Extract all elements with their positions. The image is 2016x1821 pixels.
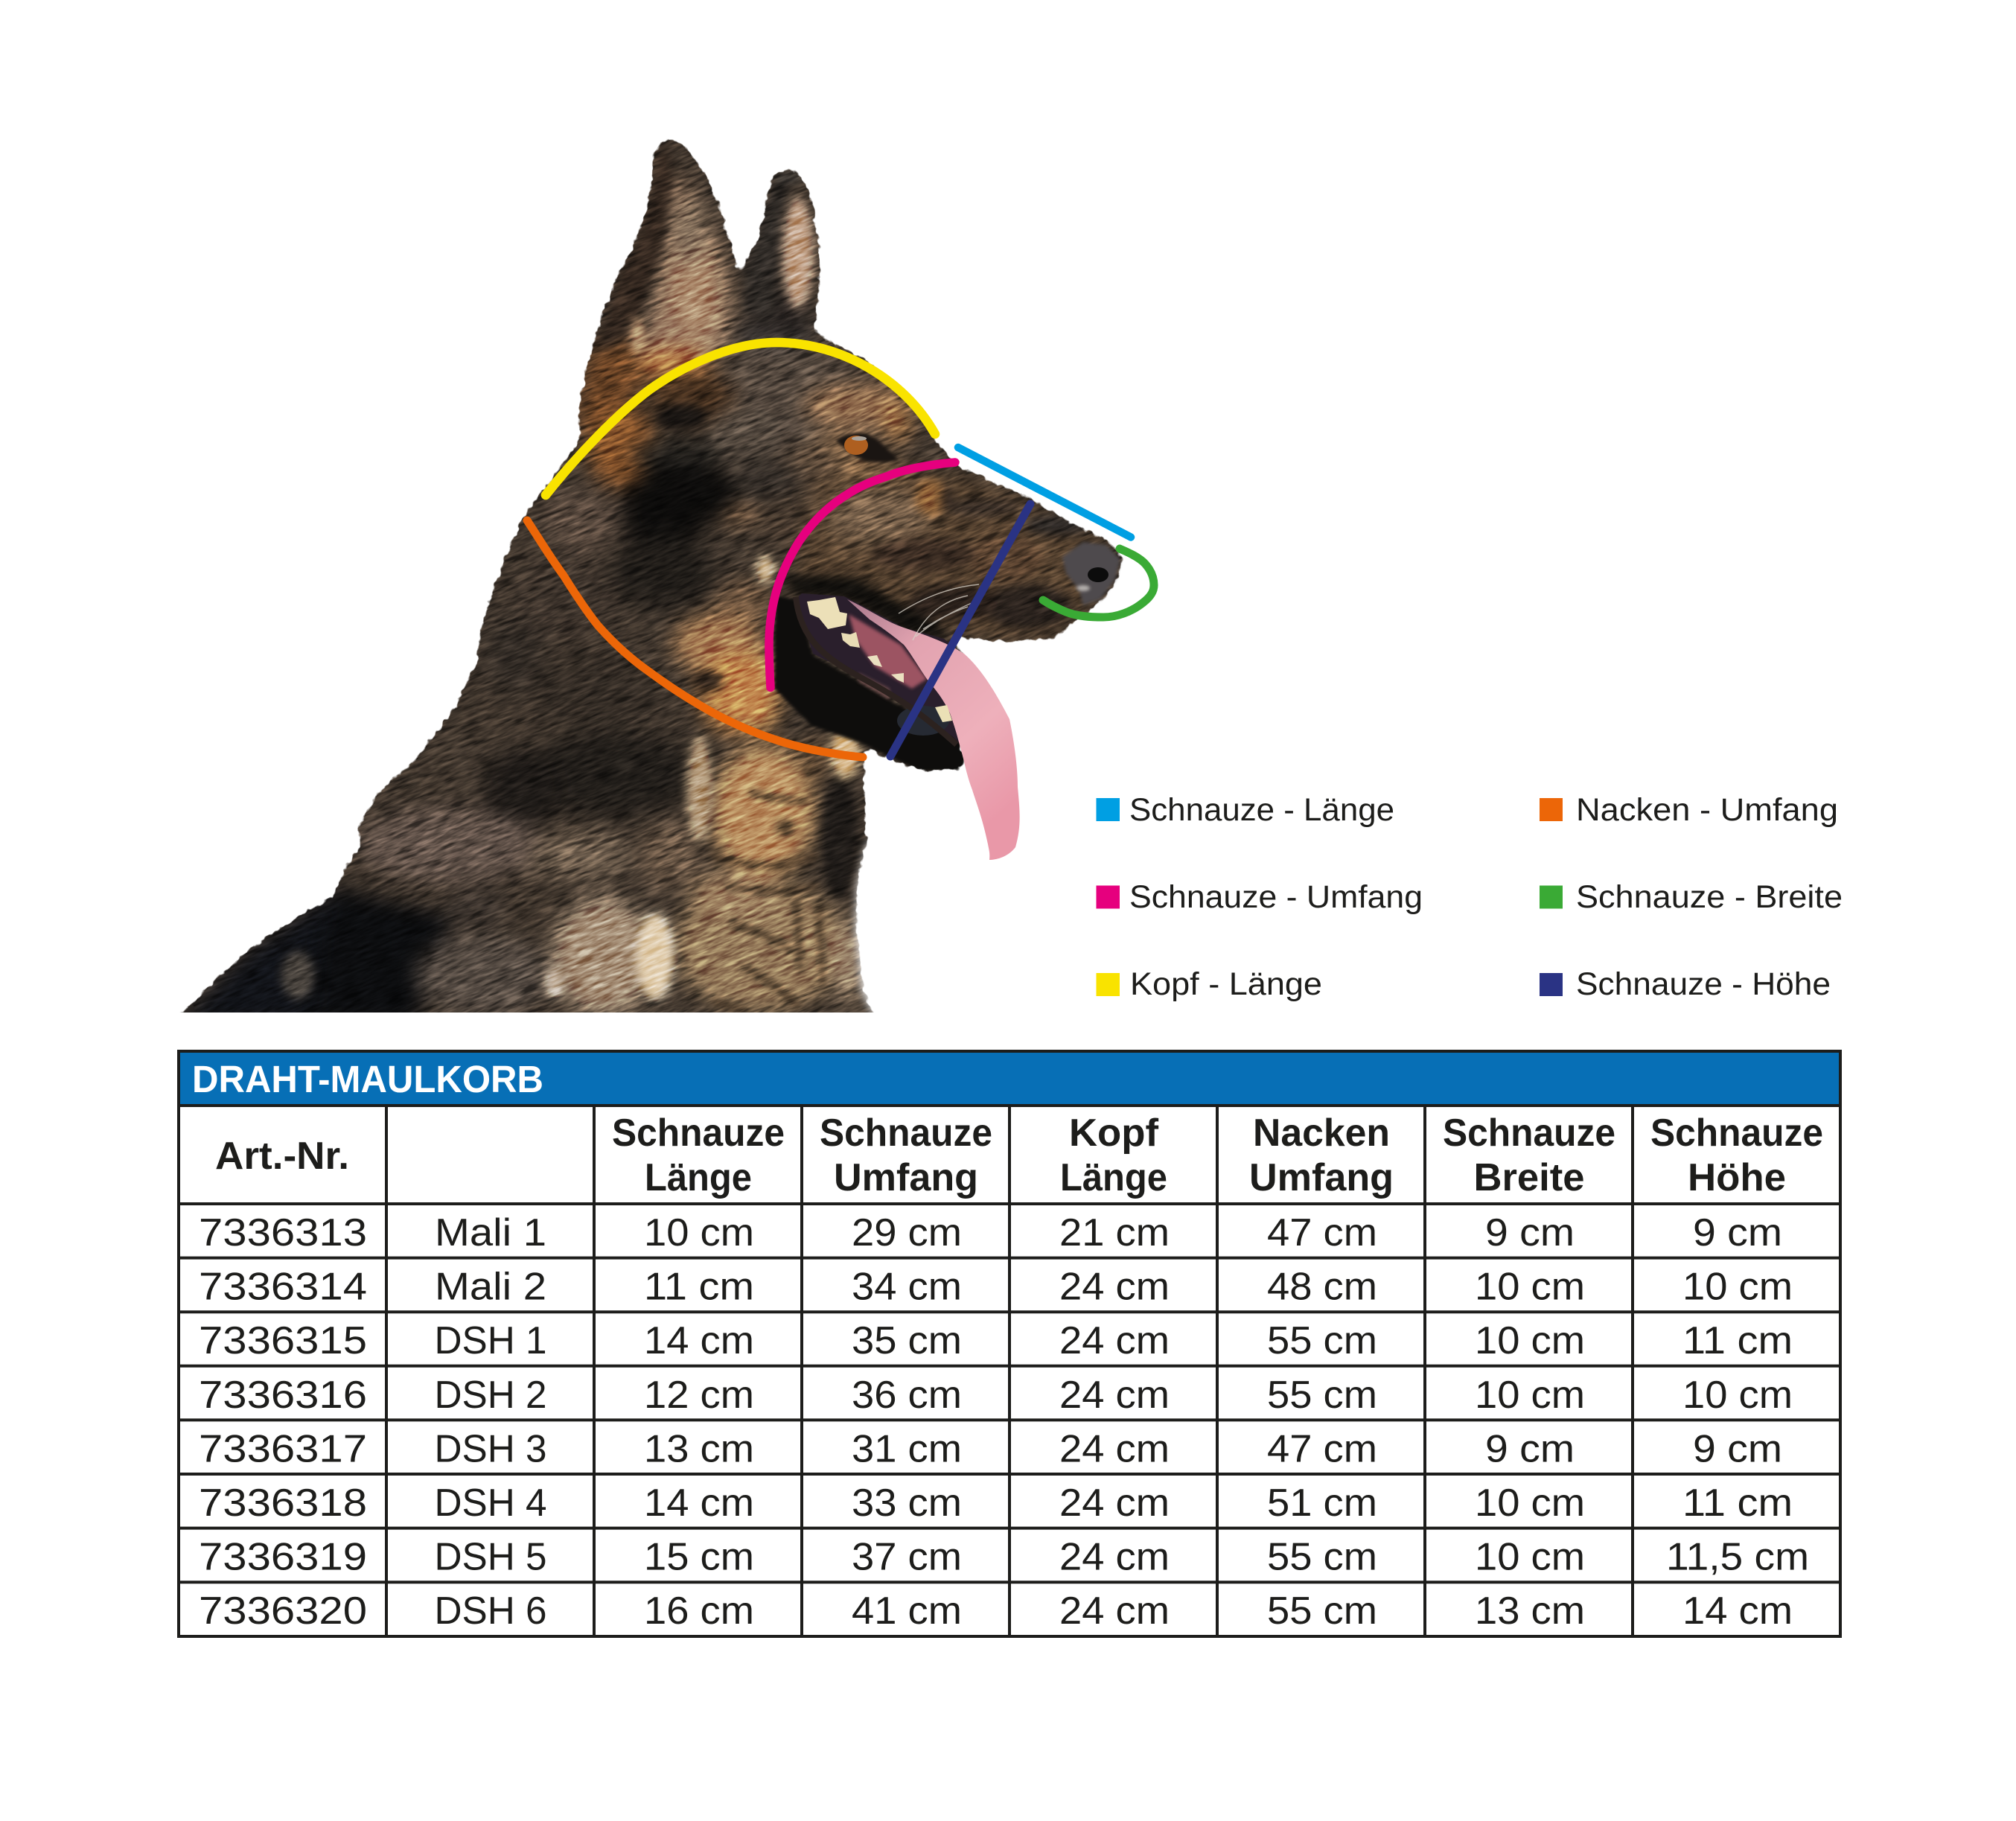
column headers: Umfang (1249, 1156, 1394, 1199)
row 7336316: 24 cm (1059, 1374, 1170, 1417)
row 7336318: 10 cm (1475, 1482, 1585, 1525)
row 7336319 (199, 1536, 1809, 1579)
row 7336313 (199, 1211, 1782, 1254)
column headers: Nacken (1253, 1112, 1390, 1155)
column headers: Höhe (1688, 1156, 1786, 1199)
measure line: Schnauze Länge (958, 447, 1131, 538)
nose (1062, 542, 1120, 605)
row 7336317: 31 cm (852, 1427, 962, 1470)
legend item: Kopf Länge: Kopf - Länge (1130, 966, 1322, 1002)
row 7336314: 34 cm (852, 1266, 962, 1309)
row 7336319: 15 cm (644, 1536, 754, 1579)
row 7336314: 10 cm (1475, 1266, 1585, 1309)
row 7336319: 24 cm (1059, 1536, 1170, 1579)
row 7336320: 13 cm (1475, 1589, 1585, 1633)
mouth interior (796, 593, 961, 744)
measure line: Schnauze Umfang (769, 462, 955, 688)
row 7336316: DSH 2 (435, 1374, 546, 1417)
row 7336316: 12 cm (644, 1374, 754, 1417)
infographic page (177, 138, 1842, 1638)
row 7336317: 24 cm (1059, 1427, 1170, 1470)
lower jaw (774, 596, 968, 771)
column headers (215, 1112, 1823, 1199)
row 7336318: 14 cm (644, 1482, 754, 1525)
row 7336314: 48 cm (1267, 1266, 1377, 1309)
row 7336319: 11,5 cm (1666, 1536, 1809, 1579)
row 7336317: 47 cm (1267, 1427, 1377, 1470)
row 7336316: 36 cm (852, 1374, 962, 1417)
row 7336317: 9 cm (1693, 1427, 1782, 1470)
row 7336320: 7336320 (199, 1589, 367, 1633)
row 7336314: 24 cm (1059, 1266, 1170, 1309)
legend item: Schnauze Höhe: Schnauze - Höhe (1576, 966, 1831, 1002)
row 7336316: 10 cm (1475, 1374, 1585, 1417)
table grid (179, 1051, 1840, 1636)
row 7336318: 7336318 (199, 1482, 367, 1525)
column headers: Schnauze (612, 1112, 785, 1155)
row 7336313: 10 cm (644, 1211, 754, 1254)
legend (1096, 792, 1843, 1002)
table title band (179, 1051, 1840, 1106)
muzzle details (782, 479, 1091, 640)
row 7336314 (199, 1266, 1793, 1309)
row 7336313: 9 cm (1485, 1211, 1575, 1254)
legend item: Schnauze Länge: Schnauze - Länge (1129, 792, 1394, 828)
row 7336319: 37 cm (852, 1536, 962, 1579)
column headers: Kopf (1069, 1112, 1159, 1155)
row 7336315 (199, 1319, 1793, 1362)
measure line: Schnauze Breite (1043, 549, 1154, 617)
row 7336317: 9 cm (1485, 1427, 1575, 1470)
row 7336316: 10 cm (1682, 1374, 1793, 1417)
row 7336318: 33 cm (852, 1482, 962, 1525)
row 7336318 (199, 1482, 1793, 1525)
row 7336319: 10 cm (1475, 1536, 1585, 1579)
row 7336314: Mali 2 (435, 1266, 546, 1309)
row 7336317 (199, 1427, 1782, 1470)
row 7336320: 14 cm (1682, 1589, 1793, 1633)
row 7336313: Mali 1 (435, 1211, 546, 1254)
row 7336320: 41 cm (852, 1589, 962, 1633)
row 7336313: 9 cm (1693, 1211, 1782, 1254)
row 7336319: 55 cm (1267, 1536, 1377, 1579)
row 7336315: 35 cm (852, 1319, 962, 1362)
row 7336313: 47 cm (1267, 1211, 1377, 1254)
row 7336314: 7336314 (199, 1266, 367, 1309)
row 7336313: 7336313 (199, 1211, 367, 1254)
column headers: Schnauze (1443, 1112, 1615, 1155)
row 7336318: 11 cm (1682, 1482, 1793, 1525)
column headers: Länge (645, 1156, 752, 1199)
row 7336317: DSH 3 (435, 1427, 546, 1470)
row 7336320: 55 cm (1267, 1589, 1377, 1633)
row 7336319: 7336319 (199, 1536, 367, 1579)
row 7336315: DSH 1 (435, 1319, 546, 1362)
row 7336318: DSH 4 (435, 1482, 546, 1525)
measure line: Kopf Länge (546, 342, 935, 495)
tongue (847, 599, 1020, 860)
chest fur stripes (715, 793, 823, 1011)
column headers: Länge (1060, 1156, 1167, 1199)
row 7336316: 55 cm (1267, 1374, 1377, 1417)
table title band: DRAHT-MAULKORB (192, 1058, 543, 1100)
row 7336320 (199, 1589, 1793, 1633)
row 7336315: 11 cm (1682, 1319, 1793, 1362)
row 7336316: 7336316 (199, 1374, 367, 1417)
row 7336314: 10 cm (1682, 1266, 1793, 1309)
legend item: Nacken Umfang: Nacken - Umfang (1576, 792, 1838, 828)
measure line: Schnauze Höhe (890, 504, 1030, 756)
photo: german shepherd dog head (180, 138, 1158, 1012)
row 7336315: 7336315 (199, 1319, 367, 1362)
column headers: Breite (1474, 1156, 1584, 1199)
measure line: Nacken Umfang (527, 520, 863, 757)
size table (179, 1051, 1840, 1636)
row 7336317: 13 cm (644, 1427, 754, 1470)
legend item: Schnauze Breite: Schnauze - Breite (1576, 879, 1843, 915)
legend item: Schnauze Umfang: Schnauze - Umfang (1129, 879, 1423, 915)
row 7336319: DSH 5 (435, 1536, 546, 1579)
row 7336315: 14 cm (644, 1319, 754, 1362)
column headers: Art.-Nr. (215, 1135, 349, 1178)
row 7336315: 10 cm (1475, 1319, 1585, 1362)
row 7336314: 11 cm (644, 1266, 754, 1309)
row 7336313: 21 cm (1059, 1211, 1170, 1254)
eye (835, 433, 899, 462)
fur texture (192, 140, 1123, 1012)
whiskers (899, 584, 979, 640)
row 7336320: 24 cm (1059, 1589, 1170, 1633)
row 7336316 (199, 1374, 1793, 1417)
column headers: Schnauze (1650, 1112, 1823, 1155)
row 7336317: 7336317 (199, 1427, 367, 1470)
row 7336320: 16 cm (644, 1589, 754, 1633)
row 7336315: 24 cm (1059, 1319, 1170, 1362)
row 7336315: 55 cm (1267, 1319, 1377, 1362)
column headers: Umfang (834, 1156, 978, 1199)
column headers: Schnauze (820, 1112, 992, 1155)
row 7336318: 24 cm (1059, 1482, 1170, 1525)
soft right edge of chest (856, 841, 908, 1014)
row 7336313: 29 cm (852, 1211, 962, 1254)
row 7336318: 51 cm (1267, 1482, 1377, 1525)
row 7336320: DSH 6 (435, 1589, 546, 1633)
